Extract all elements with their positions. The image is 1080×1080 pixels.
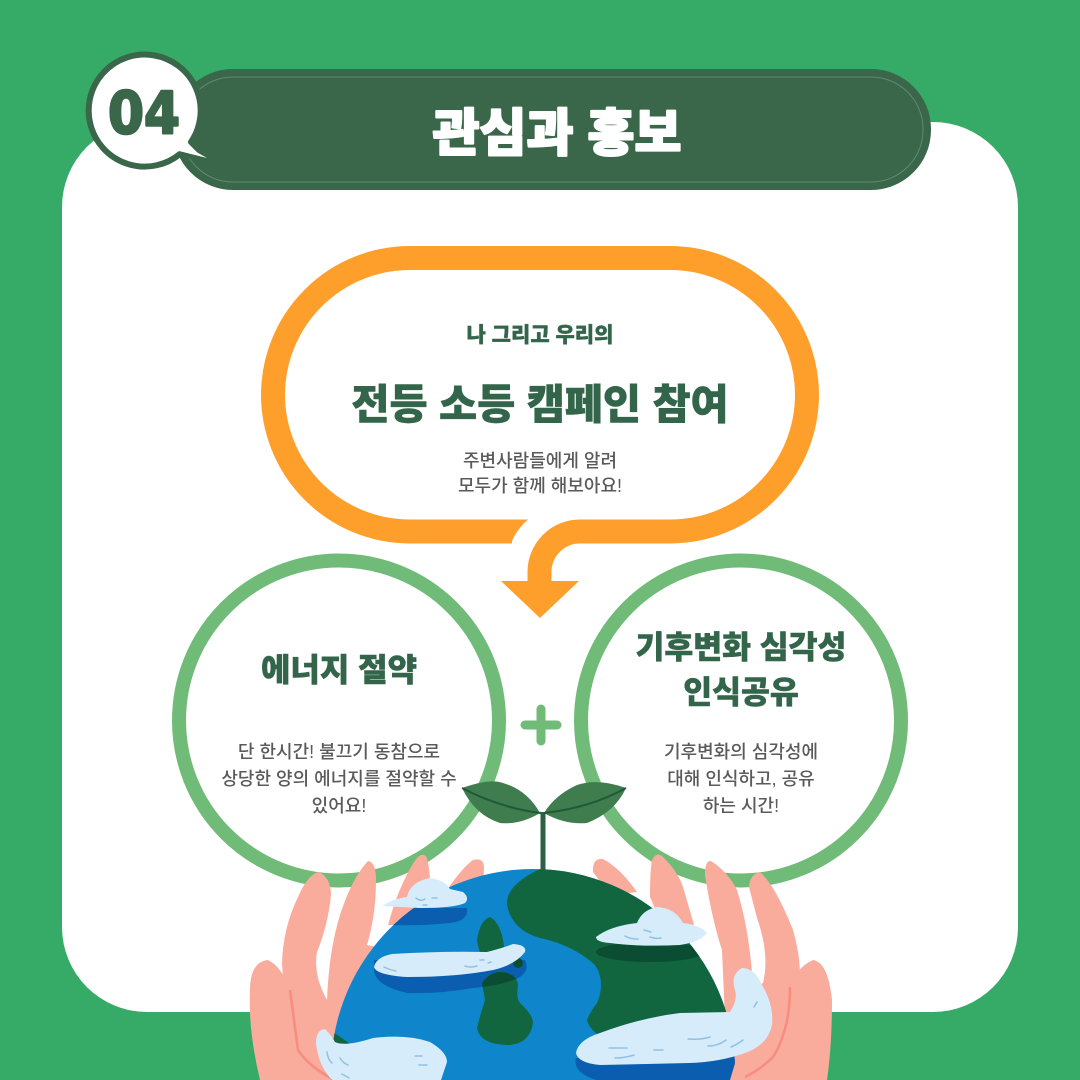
island <box>477 972 533 1045</box>
panel: climate awareness circle: 대해 인식하고, 공유 <box>667 769 815 789</box>
icon: earth globe <box>330 860 760 1080</box>
panel: climate awareness circle: 하는 시간! <box>703 796 779 816</box>
campaign text block: 모두가 함께 해보아요! <box>458 476 622 496</box>
landmass <box>506 869 735 1064</box>
campaign text block: 나 그리고 우리의 <box>467 324 613 347</box>
number speech bubble <box>89 55 207 167</box>
panel: energy saving circle: 에너지 절약 <box>261 652 417 688</box>
panel: climate awareness circle: 기후변화 심각성 <box>636 630 846 665</box>
white panel <box>62 122 1018 1012</box>
icon: right hand <box>593 854 832 1080</box>
campaign text block: 주변사람들에게 알려 <box>463 451 617 471</box>
title banner <box>173 69 931 190</box>
number: 04 <box>108 79 180 147</box>
icon: palm edge <box>730 1060 745 1080</box>
panel: energy saving circle: 있어요! <box>312 796 366 816</box>
orange speech arrow <box>273 258 807 618</box>
icon: seedling <box>462 781 626 873</box>
panel: energy saving circle: 상당한 양의 에너지를 절약할 수 <box>221 769 457 789</box>
panel: climate awareness circle <box>581 560 901 880</box>
cloud shadows <box>388 908 467 925</box>
icon: clouds <box>316 878 772 1080</box>
campaign text block: 전등 소등 캠페인 참여 <box>351 382 729 428</box>
campaign text block <box>351 324 729 496</box>
panel: climate awareness circle: 기후변화의 심각성에 <box>664 742 818 762</box>
icon: left hand <box>250 855 484 1080</box>
panel: climate awareness circle: 인식공유 <box>683 675 799 710</box>
icon: plus <box>525 709 557 741</box>
panel: energy saving circle <box>179 560 499 880</box>
icon: cloud details <box>327 898 757 1078</box>
title: 관심과 홍보 <box>433 105 681 162</box>
panel: energy saving circle: 단 한시간! 불끄기 동참으로 <box>238 742 440 762</box>
